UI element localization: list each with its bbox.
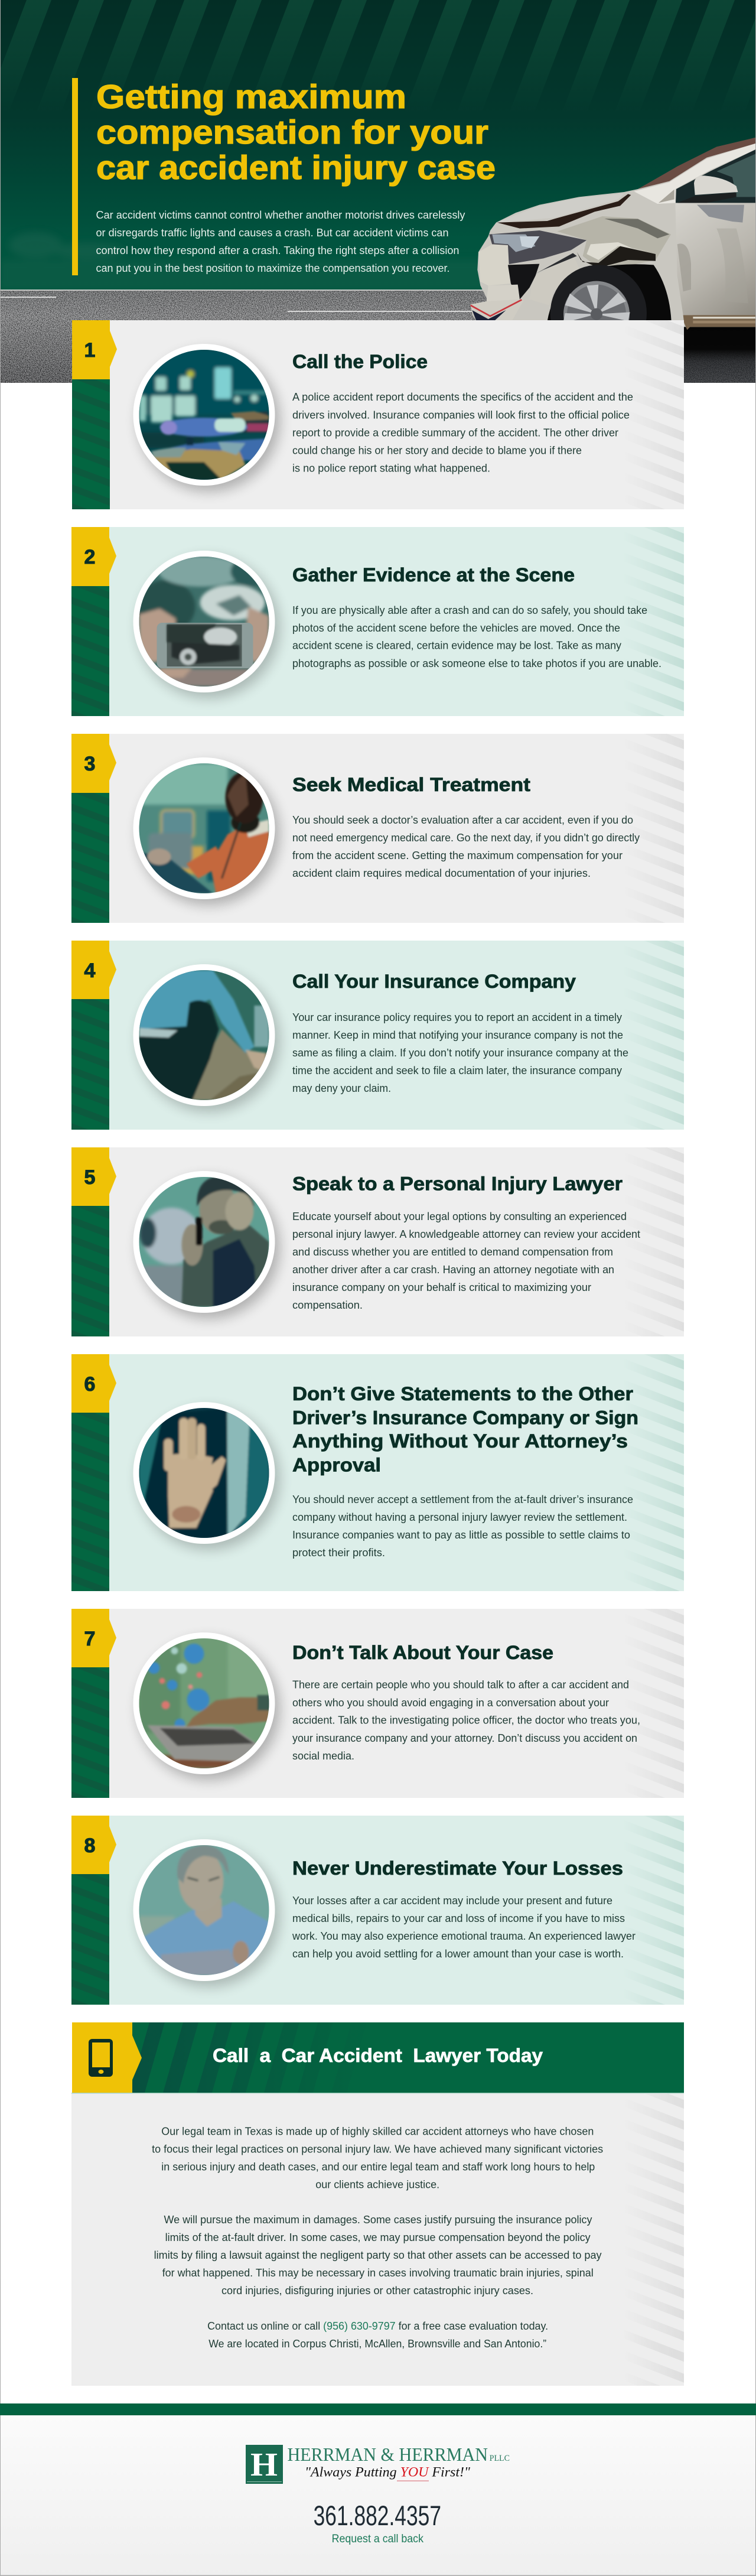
- body text: social media.: [292, 1750, 354, 1762]
- panel background: [109, 1354, 684, 1591]
- number tab: 6: [84, 1373, 95, 1396]
- footer green band: [0, 2403, 756, 2415]
- number tab: [71, 941, 116, 999]
- body text: [292, 604, 662, 669]
- number tab: 3: [84, 753, 95, 775]
- green strip: [71, 1413, 109, 1591]
- body text: may deny your claim.: [292, 1082, 391, 1094]
- panel stripes: [644, 527, 684, 716]
- damaged car: [471, 138, 756, 362]
- paragraph 1: our clients achieve justice.: [315, 2179, 439, 2191]
- closing panel: [71, 2076, 684, 2576]
- body text: work. You may also experience emotional trauma. An experienced lawyer: [292, 1930, 636, 1942]
- road: [0, 290, 756, 383]
- panel stripes: [641, 2093, 684, 2386]
- body text: from the accident scene. Getting the maximum compensation for your: [292, 850, 623, 861]
- heading: Call a Car Accident Lawyer Today: [213, 2045, 543, 2066]
- body text: insurance company on your behalf is critical to maximizing your: [292, 1282, 591, 1293]
- green strip: [71, 999, 109, 1130]
- photo: person crouched by car: [133, 964, 280, 1112]
- body text: time the accident and seek to file a claim later, the insurance company: [292, 1065, 622, 1076]
- green strip: [71, 793, 109, 923]
- step 8: never underestimate your losses: [71, 1816, 684, 2005]
- number tab: [71, 527, 116, 586]
- body text: and discuss whether you are entitled to demand compensation from: [292, 1246, 613, 1258]
- heading: Call the Police: [292, 351, 428, 372]
- step 1: call the police: [72, 320, 684, 509]
- body text: personal injury lawyer. A knowledgeable attorney can review your accident: [292, 1228, 640, 1240]
- body text: accident claim requires medical documentation of your injuries.: [292, 867, 591, 879]
- number tab: [71, 734, 116, 793]
- body text: drivers involved. Insurance companies will look first to the official police: [292, 409, 630, 421]
- photo: paramedic: [133, 757, 280, 905]
- phone number: 361.882.4357: [314, 2500, 441, 2531]
- body text: Educate yourself about your legal options by consulting an experienced: [292, 1211, 627, 1222]
- green strip: [71, 1206, 109, 1336]
- paragraph 2: for what happened. This may be necessary in cases involving traumatic brain injuries, spinal: [162, 2267, 594, 2279]
- footer: [0, 2415, 756, 2576]
- panel background: [71, 2093, 684, 2386]
- title: compensation for your: [96, 113, 488, 151]
- panel background: [109, 1816, 684, 2005]
- logo: [246, 2444, 510, 2484]
- heading: Never Underestimate Your Losses: [292, 1858, 623, 1879]
- paragraph 1: in serious injury and death cases, and our entire legal team and staff work long hours to help: [161, 2161, 595, 2173]
- body text: Insurance companies want to pay as little as possible to settle claims to: [292, 1529, 630, 1541]
- heading: Approval: [292, 1455, 381, 1476]
- green strip: [71, 1667, 109, 1798]
- heading: Don’t Give Statements to the Other: [292, 1383, 633, 1404]
- photo: man on phone: [133, 1171, 280, 1319]
- logo mark: [246, 2445, 283, 2484]
- number tab: [72, 320, 117, 379]
- intro text: can put you in the best position to maximize the compensation you recover.: [96, 262, 450, 274]
- call to action header: [72, 2022, 684, 2093]
- panel background: [109, 527, 684, 716]
- icon: phone: [89, 2039, 113, 2077]
- body text: Your losses after a car accident may include your present and future: [292, 1895, 612, 1907]
- green banner: [132, 2022, 684, 2093]
- number tab: 8: [84, 1835, 95, 1857]
- paragraph 2: We will pursue the maximum in damages. Some cases justify pursuing the insurance policy: [164, 2214, 592, 2226]
- panel background: [109, 941, 684, 1130]
- intro text: Car accident victims cannot control whether another motorist drives carelessly: [96, 209, 465, 221]
- photo: phone capturing wreck: [133, 551, 280, 698]
- body text: photographs as possible or ask someone else to take photos if you are unable.: [292, 658, 662, 669]
- body text: company without having a personal injury lawyer review the settlement.: [292, 1511, 627, 1523]
- paragraph 2: limits by filing a lawsuit against the negligent party so that other assets can be accessed to pay: [154, 2249, 602, 2261]
- body text: your insurance company and your attorney. Don’t discuss you accident on: [292, 1732, 637, 1744]
- number tab: 5: [84, 1166, 95, 1189]
- step 2: gather evidence: [71, 527, 684, 716]
- heading: Don’t Talk About Your Case: [292, 1642, 553, 1663]
- paragraph 3: contact: Contact us online or call (956) 630-9797 for a free case evaluation today.: [207, 2320, 548, 2332]
- yellow icon tab: [72, 2022, 142, 2093]
- photo: police car light: [133, 344, 280, 492]
- paragraph 1: [152, 2126, 603, 2191]
- panel stripes: [656, 734, 684, 923]
- banner stripes: [132, 2022, 289, 2093]
- photo: man reading paper: [133, 1839, 280, 1987]
- body text: not need emergency medical care. Go the next day, if you didn’t go directly: [292, 832, 640, 844]
- body text: accident scene is cleared, certain evidence may be lost. Take as many: [292, 639, 621, 651]
- green strip: [71, 1874, 109, 2005]
- body text: manner. Keep in mind that notifying your insurance company is not the: [292, 1029, 623, 1041]
- photo: social media on laptop: [133, 1632, 280, 1780]
- heading: Seek Medical Treatment: [292, 774, 530, 795]
- firm name: HERRMAN & HERRMAN: [287, 2444, 488, 2465]
- body text: If you are physically able after a crash and can do so safely, you should take: [292, 604, 647, 616]
- body text: [292, 1011, 628, 1094]
- call back link: Request a call back: [332, 2533, 423, 2545]
- body text: [292, 1679, 640, 1762]
- body text: can help you avoid settling for a lower amount than your case is worth.: [292, 1948, 624, 1960]
- step 4: call your insurance company: [71, 941, 684, 1130]
- heading: Speak to a Personal Injury Lawyer: [292, 1173, 623, 1195]
- body text: could change his or her story and decide to blame you if there: [292, 444, 582, 456]
- heading: [292, 1383, 638, 1476]
- body text: report to provide a credible summary of the accident. The other driver: [292, 427, 618, 438]
- step 3: seek medical treatment: [71, 734, 684, 923]
- body text: medical bills, repairs to your car and loss of income if you have to miss: [292, 1913, 625, 1924]
- body text: [292, 1494, 633, 1559]
- panel stripes: [656, 1147, 684, 1336]
- body text: protect their profits.: [292, 1547, 385, 1559]
- number tab: 4: [84, 960, 96, 982]
- intro text: control how they respond after a crash. Taking the right steps after a collision: [96, 245, 460, 256]
- panel background: [109, 1147, 684, 1336]
- title: car accident injury case: [96, 149, 496, 187]
- number tab: [71, 1147, 116, 1206]
- panel background: [110, 320, 684, 509]
- body text: compensation.: [292, 1299, 363, 1311]
- heading: Anything Without Your Attorney’s: [292, 1430, 628, 1452]
- green strip: [72, 379, 110, 509]
- body text: [292, 814, 640, 879]
- step 7: don't talk about your case: [71, 1609, 684, 1798]
- panel stripes: [656, 320, 684, 509]
- body text: accident. Talk to the investigating police officer, the doctor who treats you,: [292, 1715, 640, 1726]
- number tab: [71, 1609, 116, 1667]
- body text: Your car insurance policy requires you to report an accident in a timely: [292, 1011, 622, 1023]
- green strip: [71, 586, 109, 716]
- number tab: 7: [84, 1628, 95, 1650]
- heading: Driver’s Insurance Company or Sign: [292, 1407, 638, 1429]
- body text: is no police report stating what happened.: [292, 462, 490, 474]
- photo: raised hand: [133, 1402, 280, 1550]
- panel stripes: [644, 1354, 684, 1591]
- body text: A police accident report documents the specifics of the accident and the: [292, 391, 633, 403]
- number tab: [71, 1816, 116, 1874]
- panel stripes: [644, 1816, 684, 2005]
- panel background: [109, 1609, 684, 1798]
- body text: others who you should avoid engaging in a conversation about your: [292, 1697, 609, 1709]
- number tab: [71, 1354, 116, 1413]
- step 6: don't give statements: [71, 1354, 684, 1591]
- title: [96, 78, 496, 187]
- heading: Call Your Insurance Company: [292, 971, 576, 992]
- number tab: 2: [84, 546, 95, 568]
- hero banner: [0, 0, 756, 383]
- pllc: PLLC: [490, 2454, 510, 2463]
- logo mark: H: [250, 2447, 278, 2483]
- number tab: 1: [84, 339, 95, 362]
- title bar: [72, 78, 78, 275]
- body text: There are certain people who you should talk to after a car accident and: [292, 1679, 629, 1691]
- body text: [292, 1211, 640, 1311]
- body text: another driver after a car crash. Having an attorney negotiate with an: [292, 1264, 614, 1276]
- step 5: speak to a lawyer: [71, 1147, 684, 1336]
- paragraph 2: limits of the at-fault driver. In some cases, we may pursue compensation beyond the policy: [165, 2232, 591, 2243]
- intro text: or disregards traffic lights and causes a crash. But car accident victims can: [96, 227, 449, 239]
- paragraph 1: to focus their legal practices on personal injury law. We have achieved many significant victories: [152, 2144, 603, 2155]
- heading: Gather Evidence at the Scene: [292, 564, 575, 586]
- body text: [292, 391, 633, 474]
- paragraph 2: cord injuries, disfiguring injuries or other catastrophic injury cases.: [221, 2285, 533, 2297]
- paragraph 2: [154, 2214, 602, 2297]
- paragraph 1: Our legal team in Texas is made up of highly skilled car accident attorneys who have chosen: [161, 2126, 594, 2138]
- body text: You should seek a doctor’s evaluation after a car accident, even if you do: [292, 814, 633, 826]
- paragraph 3: contact: [207, 2320, 548, 2350]
- panel background: [109, 734, 684, 923]
- title: Getting maximum: [96, 78, 406, 116]
- body text: [292, 1895, 636, 1960]
- tagline: "Always Putting YOU First!": [305, 2465, 470, 2479]
- panel stripes: [644, 941, 684, 1130]
- body text: You should never accept a settlement from the at-fault driver’s insurance: [292, 1494, 633, 1505]
- intro text: [96, 209, 465, 274]
- panel stripes: [656, 1609, 684, 1798]
- body text: photos of the accident scene before the vehicles are moved. Once the: [292, 622, 620, 634]
- body text: same as filing a claim. If you don’t notify your insurance company at the: [292, 1047, 628, 1059]
- paragraph 3: contact: We are located in Corpus Christi, McAllen, Brownsville and San Antonio.”: [208, 2338, 546, 2350]
